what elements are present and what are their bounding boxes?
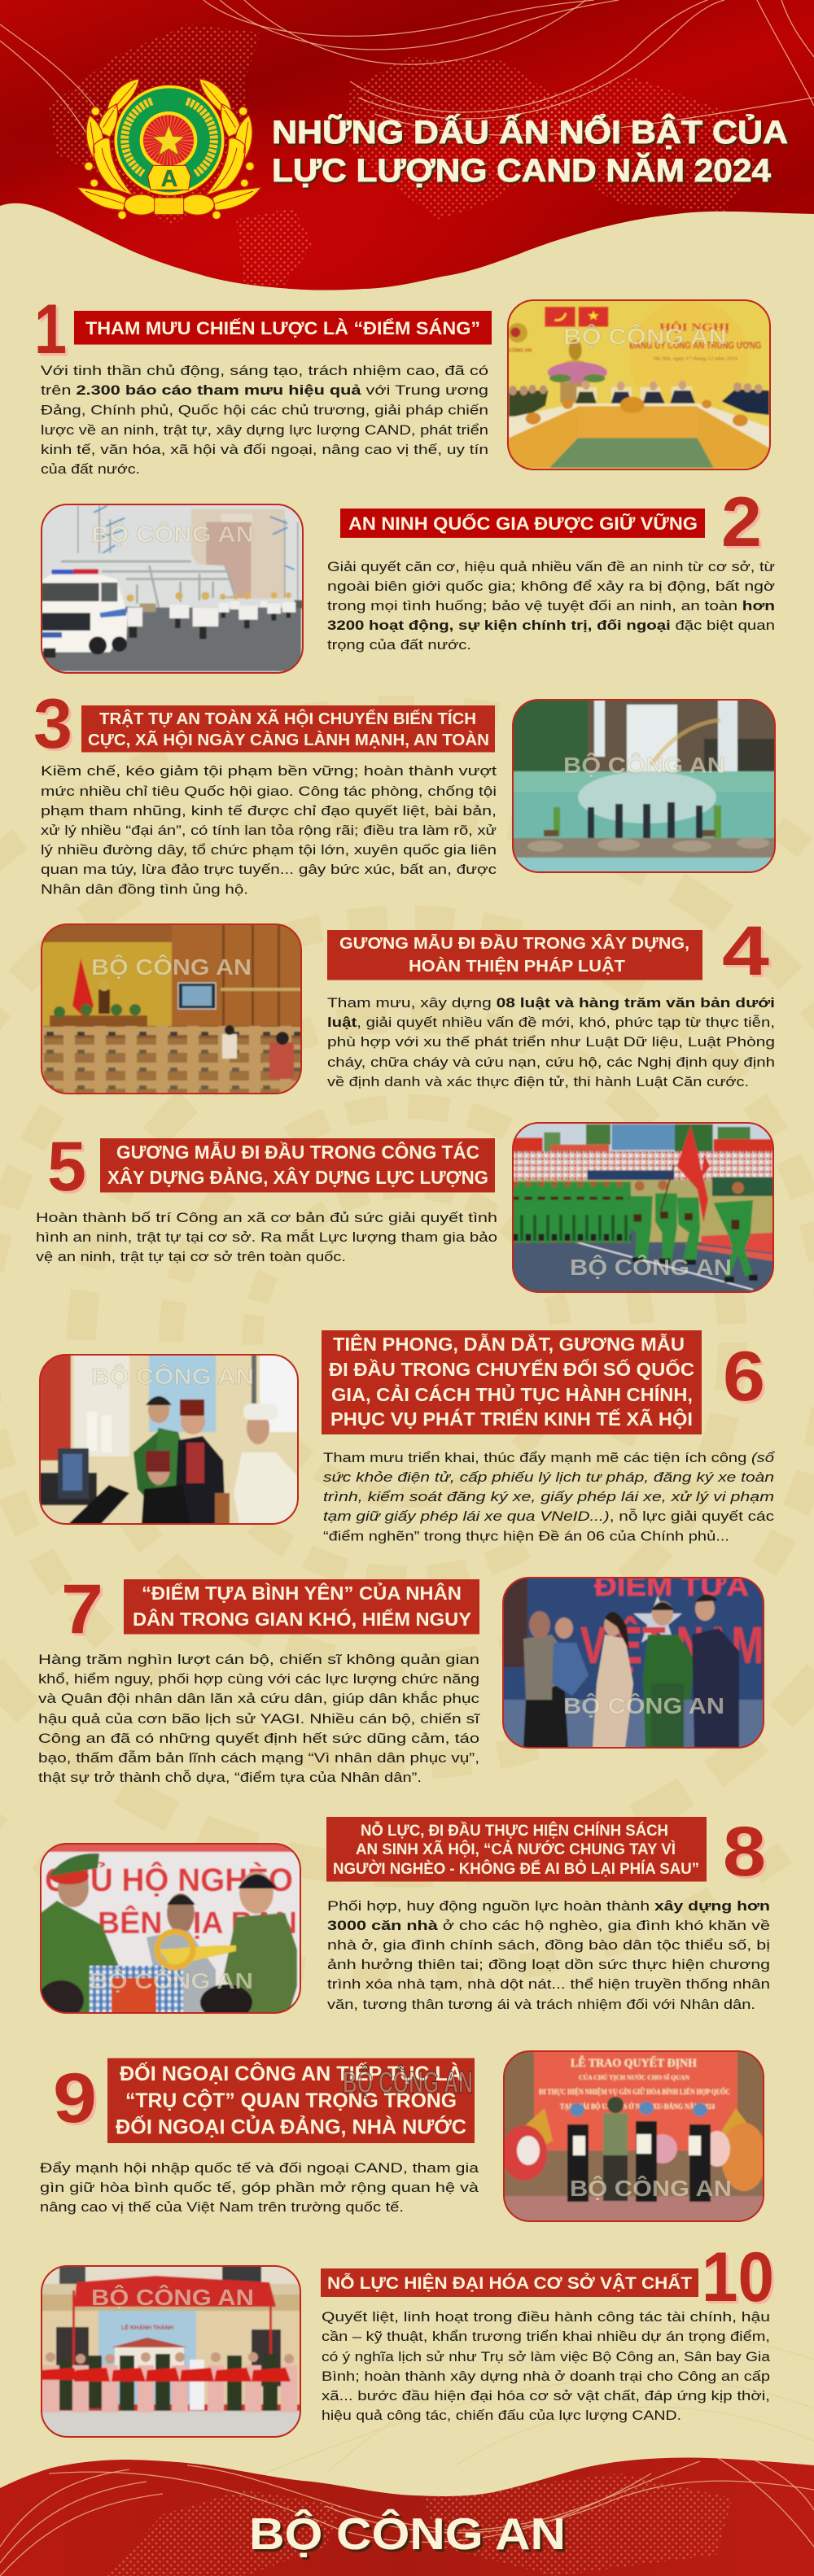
section 2: national security — [37, 483, 775, 675]
photo 7: stage — [503, 1571, 764, 1748]
number 1: 1 — [34, 290, 67, 369]
photo 8: house key handover: CHỦ HỘ NGHÈO — [45, 1861, 293, 1898]
text block 1: lược về an ninh, trật tự, xây dựng lực lượng CAND, phát triển — [41, 423, 488, 438]
watermark on heading: BỘ CÔNG AN — [343, 2063, 473, 2100]
heading 10: NỖ LỰC HIỆN ĐẠI HÓA CƠ SỞ VẬT CHẤT — [327, 2273, 692, 2293]
text block 8: trình xóa nhà tạm, nhà dột nát... thể hiện truyền thống nhân — [327, 1977, 770, 1992]
photo 1: conference: HỘI NGHỊ — [659, 321, 730, 334]
photo 8: house key handover — [38, 1844, 300, 2020]
text block 10: Bình; hoàn thành xây dựng nhà ở doanh trại cho Công an cấp — [322, 2369, 770, 2384]
text block 9: nâng cao vị thế của Việt Nam trên trường quốc tế. — [40, 2200, 404, 2215]
text block 3: Nhân dân đồng tình ủng hộ. — [41, 882, 248, 897]
heading 5: XÂY DỰNG ĐẢNG, XÂY DỰNG LỰC LƯỢNG — [107, 1165, 488, 1188]
photo 1: conference: CÔNG AN — [509, 347, 532, 354]
number 6: 6 — [723, 1338, 765, 1416]
number 9: 9 — [53, 2059, 97, 2137]
heading 1 — [74, 311, 492, 345]
text block 8: văn, tương thân tương ái và trách nhiệm đối với Nhân dân. — [327, 1997, 755, 2012]
text block 2 — [327, 560, 775, 653]
text block 10: Quyết liệt, linh hoạt trong điều hành công tác tài chính, hậu — [322, 2310, 770, 2325]
text block 10: cần – kỹ thuật, khẩn trương triển khai nhiều dự án trọng điểm, — [322, 2329, 770, 2344]
section 7: people's support — [38, 1570, 764, 1785]
text block 1: trên 2.300 báo cáo tham mưu hiệu quả với Trung ương — [41, 383, 488, 398]
text block 7: Công an đã có những quyết định hết sức dũng cảm, táo — [38, 1731, 479, 1746]
text block 5: Hoàn thành bố trí Công an xã cơ bản đủ sức giải quyết tình — [36, 1211, 497, 1225]
section 3: social order — [33, 685, 775, 897]
section 5: party building — [36, 1119, 777, 1295]
heading 6: ĐI ĐẦU TRONG CHUYỂN ĐỔI SỐ QUỐC — [329, 1358, 694, 1380]
title: LỰC LƯỢNG CAND NĂM 2024 — [272, 152, 772, 189]
heading 2 — [340, 509, 705, 538]
photo 9: award ceremony: CỦA CHỦ TỊCH NƯỚC CHO SĨ QUAN — [579, 2073, 689, 2081]
heading 5 — [100, 1138, 495, 1193]
text block 3: lý nhiều đường dây, tổ chức phạm tội lớn, xuyên quốc gia liên — [41, 843, 497, 858]
text block 8 — [327, 1899, 770, 2012]
photo 2: motorcade: BỘ CÔNG AN — [91, 521, 254, 547]
emblem: public security badge — [77, 79, 261, 220]
text block 1: kinh tế, văn hóa, xã hội và đối ngoại, nâng cao vị thế, uy tín — [41, 443, 488, 457]
photo 8: house key handover: BỘ CÔNG AN — [90, 1967, 253, 1993]
text block 8: nhà ở, gia đình chính sách, đồng bào dân tộc thiểu số, bị — [327, 1938, 770, 1953]
heading 2: AN NINH QUỐC GIA ĐƯỢC GIỮ VỮNG — [348, 513, 698, 534]
photo 2: motorcade — [37, 500, 305, 675]
text block 8: 3000 căn nhà ở cho các hộ nghèo, gia đình khó khăn về — [327, 1919, 770, 1933]
text block 2: 3200 hoạt động, sự kiện chính trị, đối ngoại đặc biệt quan — [327, 618, 775, 633]
number 5: 5 — [47, 1128, 86, 1206]
text block 4: cháy, chữa cháy và cứu nạn, cứu hộ, các Nghị định quy định — [327, 1055, 775, 1070]
photo 9: award ceremony — [501, 2051, 767, 2221]
text block 1: Với tinh thần chủ động, sáng tạo, trách nhiệm cao, đã có — [41, 364, 488, 378]
photo 7: stage: ĐIỂM TỰA — [594, 1571, 749, 1602]
photo 7: stage: BỘ CÔNG AN — [563, 1692, 724, 1718]
heading 3: TRẬT TỰ AN TOÀN XÃ HỘI CHUYỂN BIẾN TÍCH — [99, 709, 476, 728]
text block 7: hậu quả của cơn bão lịch sử YAGI. Nhiều cán bộ, chiến sĩ — [38, 1712, 481, 1727]
heading 8 — [326, 1817, 707, 1881]
section 6: digital transformation — [40, 1330, 775, 1544]
footer banner — [0, 2453, 814, 2576]
photo 1: conference: BỘ CÔNG AN — [563, 323, 727, 349]
text block 3: quan ma túy, lừa đảo trực tuyến... gây bức xúc, bất an, được — [41, 862, 497, 877]
heading 9: “TRỤ CỘT” QUAN TRỌNG TRONG — [125, 2088, 457, 2112]
text block 10: xã... bước đầu hiện đại hóa cơ sở vật chất, đáp ứng kịp thời, — [322, 2389, 770, 2404]
text block 8: Phối hợp, huy động nguồn lực hoàn thành xây dựng hơn — [327, 1899, 770, 1914]
heading 9: ĐỐI NGOẠI CÔNG AN TIẾP TỤC LÀ — [120, 2061, 462, 2085]
text block 6 — [323, 1451, 775, 1544]
heading 7 — [124, 1579, 479, 1634]
heading 5: GƯƠNG MẪU ĐI ĐẦU TRONG CÔNG TÁC — [116, 1140, 479, 1163]
photo 10: ribbon cutting: BỘ CÔNG AN — [91, 2284, 254, 2310]
text block 9 — [40, 2161, 479, 2215]
section 8: social welfare — [38, 1813, 770, 2020]
text block 2: Giải quyết căn cơ, hiệu quả nhiều vấn đề an ninh từ cơ sở, từ — [327, 560, 775, 574]
heading 6: TIÊN PHONG, DẪN DẮT, GƯƠNG MẪU — [333, 1332, 685, 1355]
photo 5: parade — [509, 1119, 777, 1295]
heading 1: THAM MƯU CHIẾN LƯỢC LÀ “ĐIỂM SÁNG” — [85, 318, 480, 338]
text block 3 — [41, 764, 497, 897]
text block 7: bạo, thấm đẫm bản lĩnh cách mạng “Vì nhân dân phục vụ”, — [38, 1750, 479, 1766]
heading 3: CỰC, XÃ HỘI NGÀY CÀNG LÀNH MẠNH, AN TOÀN — [88, 730, 489, 749]
heading 8: NỖ LỰC, ĐI ĐẦU THỰC HIỆN CHÍNH SÁCH — [361, 1822, 668, 1840]
number 4: 4 — [722, 912, 769, 990]
heading 7: DÂN TRONG GIAN KHÓ, HIỂM NGUY — [133, 1608, 471, 1630]
heading 4: HOÀN THIỆN PHÁP LUẬT — [409, 956, 626, 976]
photo 9: award ceremony: BỘ CÔNG AN — [570, 2175, 732, 2201]
heading 8: NGƯỜI NGHÈO - KHÔNG ĐỂ AI BỎ LẠI PHÍA SAU” — [333, 1860, 699, 1878]
title — [272, 112, 788, 189]
text block 3: mức nhiều chỉ tiêu Quốc hội giao. Công tác phòng, chống tội — [41, 784, 497, 799]
text block 7 — [38, 1653, 481, 1785]
header banner — [0, 0, 814, 293]
text block 2: ngoài biên giới quốc gia; không để xảy ra bị động, bất ngờ — [327, 579, 775, 594]
text block 4: Tham mưu, xây dựng 08 luật và hàng trăm văn bản dưới — [327, 996, 775, 1011]
text block 6: sức khỏe điện tử, cấp phiếu lý lịch tư pháp, đăng ký xe toàn — [323, 1470, 774, 1485]
text block 9: Đẩy mạnh hội nhập quốc tế và đối ngoại CAND, tham gia — [40, 2161, 479, 2176]
text block 5: hình an ninh, trật tự tại cơ sở. Ra mắt Lực lượng tham gia bảo — [36, 1229, 497, 1245]
heading 7: “ĐIỂM TỰA BÌNH YÊN” CỦA NHÂN — [142, 1581, 462, 1604]
photo 4: national assembly: BỘ CÔNG AN — [91, 954, 252, 980]
text block 6: trình, kiểm soát đăng ký xe, giấy phép lái xe, xử lý vi phạm — [323, 1490, 774, 1504]
text block 10: có ý nghĩa lịch sử như Trụ sở làm việc Bộ Công an, Sân bay Gia — [322, 2350, 771, 2364]
photo 9: award ceremony: ĐI THỰC HIỆN NHIỆM VỤ GÌN GIỮ HÒA BÌNH LIÊN HỢP QUỐC — [539, 2088, 730, 2096]
photo 4: national assembly — [42, 924, 301, 1094]
text block 3: phạm tham nhũng, kinh tế được chỉ đạo quyết liệt, bài bản, — [41, 804, 497, 819]
text block 6: “điểm nghẽn” trong thực hiện Đề án 06 của Chính phủ... — [323, 1530, 729, 1544]
heading 3 — [81, 705, 495, 752]
heading 9 — [107, 2059, 475, 2143]
photo 6: service desk: BỘ CÔNG AN — [91, 1363, 254, 1389]
text block 5 — [36, 1211, 497, 1264]
photo 1: conference — [505, 297, 773, 472]
text block 2: trong mọi tình huống; bảo vệ tuyệt đối an ninh, an toàn hơn — [327, 599, 775, 613]
number 3: 3 — [33, 685, 72, 763]
photo 3: waterfall patrol — [513, 700, 775, 872]
text block 7: thật sự trở thành chỗ dựa, “điểm tựa của Nhân dân”. — [38, 1770, 422, 1785]
photo 10: ribbon cutting — [42, 2266, 300, 2437]
number 10: 10 — [702, 2238, 774, 2316]
number 8: 8 — [723, 1813, 766, 1891]
section 1: strategic advice — [34, 290, 773, 477]
title: NHỮNG DẤU ẤN NỔI BẬT CỦA — [272, 112, 788, 151]
text block 2: trọng của đất nước. — [327, 638, 471, 653]
text block 7: Hàng trăm nghìn lượt cán bộ, chiến sĩ không quản gian — [38, 1653, 479, 1667]
photo 10: ribbon cutting: LỄ KHÁNH THÀNH — [121, 2324, 173, 2331]
heading 9: ĐỐI NGOẠI CỦA ĐẢNG, NHÀ NƯỚC — [116, 2114, 466, 2138]
number 2: 2 — [721, 483, 762, 561]
photo 9: award ceremony: LỄ TRAO QUYẾT ĐỊNH — [571, 2055, 697, 2070]
heading 6 — [322, 1330, 702, 1434]
heading 10 — [321, 2268, 698, 2297]
text block 3: Kiềm chế, kéo giảm tội phạm bền vững; hoàn thành vượt — [41, 764, 497, 779]
section 9: foreign affairs — [40, 2051, 767, 2221]
text block 9: gìn giữ hòa bình quốc tế, góp phần mở rộng quan hệ và — [40, 2181, 479, 2195]
photo 1: conference: Hà Nội, ngày 17 tháng 12 năm 2024 — [652, 356, 737, 362]
photo 3: waterfall patrol: BỘ CÔNG AN — [563, 752, 725, 778]
heading 6: GIA, CẢI CÁCH THỦ TỤC HÀNH CHÍNH, — [331, 1382, 693, 1405]
text block 6: tạm giữ giấy phép lái xe qua VNeID...) , nỗ lực giải quyết các — [323, 1508, 774, 1524]
text block 7: và Quân đội nhân dân lăn xả cứu dân, giúp dân khắc phục — [38, 1691, 479, 1706]
photo 6: service desk — [40, 1355, 298, 1524]
text block 10 — [322, 2310, 771, 2423]
number 7: 7 — [61, 1570, 103, 1648]
text block 1 — [41, 364, 488, 477]
text block 4: luật , giải quyết nhiều vấn đề mới, khó, phức tạp từ thực tiễn, — [327, 1015, 775, 1030]
heading 4 — [327, 930, 702, 980]
heading 6: PHỤC VỤ PHÁT TRIỂN KINH TẾ XÃ HỘI — [330, 1408, 693, 1430]
text block 4: phù hợp với xu thế phát triển như Luật Dữ liệu, Luật Phòng — [327, 1035, 775, 1050]
photo 8: house key handover: BÊN ĐỊA BÀN — [98, 1905, 297, 1941]
photo 1: conference: ĐẢNG ỦY CÔNG AN TRUNG ƯƠNG — [629, 338, 761, 351]
heading 8: AN SINH XÃ HỘI, “CẢ NƯỚC CHUNG TAY VÌ — [356, 1840, 676, 1858]
section 10: modernising facilities — [42, 2238, 774, 2437]
section 4: lawmaking — [42, 912, 775, 1094]
text block 4 — [327, 996, 775, 1089]
text block 8: ảnh hưởng thiên tai; đồng loạt dồn sức thực hiện chương — [327, 1958, 770, 1972]
text block 4: về định danh và xác thực điện tử, thi hành Luật Căn cước. — [327, 1075, 749, 1089]
photo 9: award ceremony: TẠI PHÁI BỘ UNMISS Ở NAM XU-ĐĂNG NĂM 2024 — [560, 2102, 715, 2111]
text block 7: khổ, hiểm nguy, phối hợp cùng với các lực lượng chức năng — [38, 1672, 479, 1687]
text block 6: Tham mưu triển khai, thúc đẩy mạnh mẽ các tiện ích công (sổ — [323, 1451, 775, 1465]
footer title: BỘ CÔNG AN — [249, 2508, 566, 2559]
text block 3: xử lý nhiều “đại án”, có tính lan tỏa rộng rãi; điều tra làm rõ, xử — [41, 823, 497, 838]
text block 1: Đảng, Chính phủ, Quốc hội các chủ trương, giải pháp chiến — [41, 404, 488, 418]
text block 1: của đất nước. — [41, 462, 140, 477]
heading 4: GƯƠNG MẪU ĐI ĐẦU TRONG XÂY DỰNG, — [339, 933, 689, 953]
emblem: public security badge: A — [161, 166, 177, 192]
photo 5: parade: BỘ CÔNG AN — [570, 1254, 732, 1280]
text block 5: vệ an ninh, trật tự tại cơ sở trên toàn quốc. — [36, 1250, 346, 1264]
text block 10: hiệu quả công tác, chiến đấu của lực lượng CAND. — [322, 2408, 681, 2423]
